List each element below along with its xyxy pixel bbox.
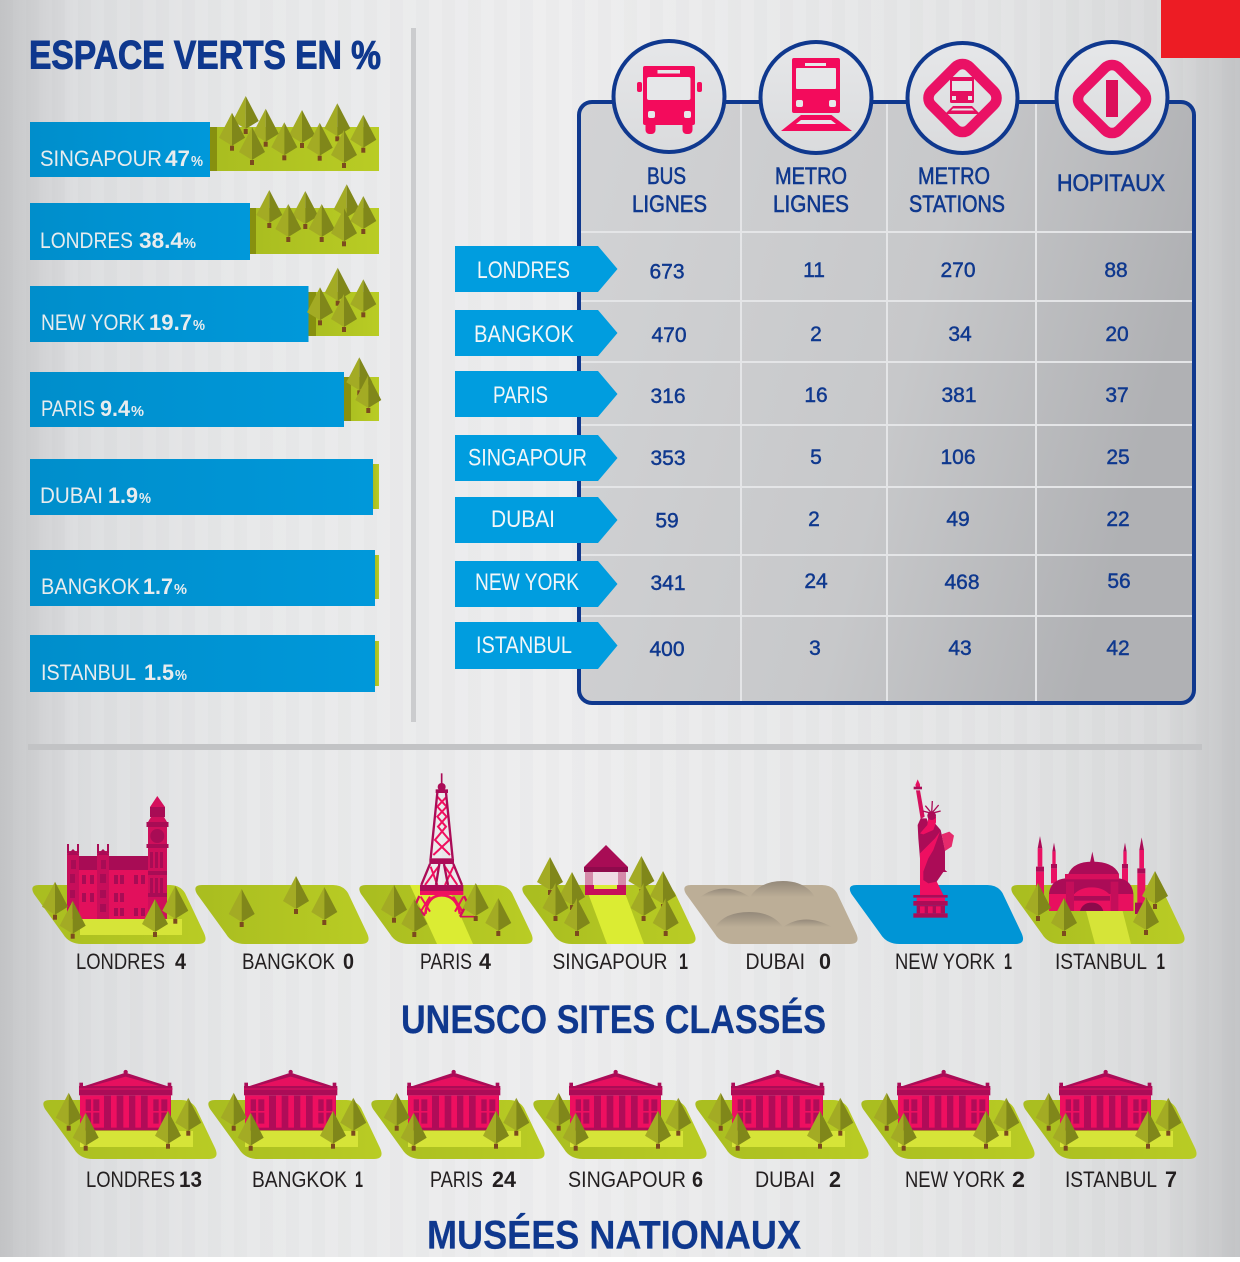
- row: Bangkok: 2: [810, 323, 822, 346]
- panel: UNESCO sites: [32, 773, 1185, 1042]
- row: Paris: [455, 371, 1129, 417]
- bar: Bangkok: %: [174, 581, 187, 598]
- bar: Paris: PARIS: [41, 396, 95, 421]
- site: New York, statue of liberty: NEW YORK: [895, 949, 995, 974]
- row: New York: 468: [944, 571, 980, 594]
- row: Bangkok: 34: [948, 323, 972, 346]
- row: Londres: [455, 246, 1128, 292]
- title: espace verts: ESPACE VERTS EN %: [29, 34, 381, 78]
- museum: Singapour: 6: [692, 1167, 703, 1192]
- museum: Londres: [43, 1070, 217, 1192]
- bar: New York: [30, 268, 379, 342]
- site: Londres: LONDRES: [76, 949, 165, 974]
- site: Paris, Eiffel tower: PARIS: [420, 949, 472, 974]
- row: Singapour: 25: [1106, 446, 1130, 469]
- site: Istanbul, mosque: ISTANBUL: [1055, 949, 1147, 974]
- row: Londres: 270: [940, 259, 976, 282]
- bar: Londres: LONDRES: [40, 228, 133, 253]
- row: Dubai: 49: [946, 508, 970, 531]
- row: Paris: 381: [941, 384, 977, 407]
- site: Dubai, dunes: 0: [819, 949, 831, 974]
- icon: bus: [614, 41, 724, 152]
- museum: Londres: 13: [179, 1167, 202, 1192]
- site: Londres: [32, 796, 206, 974]
- row: Bangkok: [455, 310, 1129, 356]
- museum: Singapour: SINGAPOUR: [568, 1167, 686, 1192]
- column headings: BUS: [647, 163, 686, 190]
- row: Istanbul: 43: [948, 637, 972, 660]
- bar: Dubai: %: [139, 490, 151, 507]
- row: Singapour: 353: [650, 447, 686, 470]
- row: New York: 341: [650, 572, 686, 595]
- bar: New York: %: [193, 317, 205, 334]
- row: Istanbul: [455, 622, 1130, 669]
- bar: Paris: [30, 357, 381, 427]
- site: Istanbul, mosque: 1: [1156, 949, 1165, 974]
- row: New York: 24: [804, 570, 828, 593]
- museum: New York: 2: [1012, 1167, 1025, 1192]
- row: Bangkok: 470: [651, 324, 687, 347]
- column headings: HOPITAUX: [1057, 170, 1165, 197]
- panel: transport table: [455, 41, 1194, 703]
- site: Singapour, gazebo: SINGAPOUR: [552, 949, 668, 974]
- row: New York: NEW YORK: [475, 569, 579, 596]
- site: Bangkok: 0: [343, 949, 354, 974]
- museum: Istanbul: ISTANBUL: [1065, 1167, 1157, 1192]
- column headings: [632, 163, 1165, 218]
- row: Singapour: 106: [940, 446, 976, 469]
- row: Istanbul: 42: [1106, 637, 1130, 660]
- row: Paris: 37: [1105, 384, 1129, 407]
- icon: metro line: [760, 42, 872, 153]
- bar: Istanbul: [30, 635, 379, 692]
- row: Singapour: SINGAPOUR: [468, 444, 587, 472]
- row: Dubai: 22: [1106, 508, 1130, 531]
- bar: Dubai: [30, 459, 379, 515]
- museum: New York: NEW YORK: [905, 1167, 1005, 1192]
- row: Dubai: 2: [808, 508, 820, 531]
- museum: Istanbul: [1023, 1070, 1197, 1192]
- column headings: LIGNES: [773, 191, 849, 218]
- row: Paris: 16: [804, 384, 828, 407]
- row: Bangkok: 20: [1105, 323, 1129, 346]
- row: Londres: 673: [649, 260, 685, 284]
- icon: hospital: [1056, 42, 1168, 153]
- row: Singapour: 5: [810, 446, 822, 469]
- column headings: METRO: [775, 163, 847, 190]
- bar: New York: NEW YORK: [41, 310, 145, 335]
- site: Dubai, dunes: DUBAI: [746, 949, 805, 974]
- museum: Bangkok: 1: [355, 1167, 363, 1192]
- museum: Paris: PARIS: [430, 1167, 483, 1192]
- bar: Istanbul: 1.5: [144, 660, 174, 685]
- panel: national museums: [43, 1070, 1197, 1258]
- column headings: LIGNES: [632, 191, 707, 218]
- museum: New York: [861, 1070, 1035, 1192]
- site: Londres: 4: [175, 949, 187, 974]
- bar: Londres: 38.4: [139, 228, 184, 253]
- row: Paris: 316: [650, 385, 686, 408]
- heading: UNESCO: UNESCO SITES CLASSÉS: [401, 997, 826, 1042]
- row: Bangkok: BANGKOK: [474, 321, 574, 348]
- red corner square: [1161, 0, 1240, 58]
- row: Londres: 88: [1104, 259, 1128, 282]
- museum: Bangkok: [208, 1070, 382, 1192]
- bar: Istanbul: ISTANBUL: [41, 660, 136, 685]
- museum: Londres: LONDRES: [86, 1167, 175, 1192]
- bar chart: green space: [30, 96, 381, 692]
- site: New York, statue of liberty: [850, 779, 1023, 974]
- museum: Bangkok: BANGKOK: [252, 1167, 347, 1192]
- bar: Londres: %: [183, 235, 196, 252]
- column headings: METRO: [918, 163, 990, 190]
- bar: Singapour: 47: [165, 146, 190, 171]
- row: Istanbul: 400: [649, 638, 685, 661]
- row: Dubai: 59: [655, 510, 679, 532]
- column headings: STATIONS: [909, 191, 1005, 218]
- site: Bangkok: [195, 876, 369, 974]
- icon: metro station: [908, 43, 1018, 153]
- museum: Paris: [371, 1070, 545, 1192]
- museum: Dubai: 2: [829, 1167, 841, 1192]
- bar: Londres: [30, 184, 379, 260]
- heading: musées: MUSÉES NATIONAUX: [427, 1212, 801, 1258]
- museum: Paris: 24: [492, 1167, 517, 1192]
- bar: New York: 19.7: [149, 310, 192, 335]
- bar: Dubai: 1.9: [108, 483, 138, 508]
- site: Paris, Eiffel tower: [359, 773, 533, 974]
- site: Paris, Eiffel tower: 4: [479, 949, 492, 974]
- site: Singapour, gazebo: [522, 845, 696, 974]
- site: Singapour, gazebo: 1: [679, 949, 688, 974]
- row: Istanbul: ISTANBUL: [476, 632, 572, 659]
- bar: Paris: %: [131, 403, 144, 420]
- bar: Paris: 9.4: [100, 396, 131, 421]
- site: New York, statue of liberty: 1: [1004, 949, 1012, 974]
- row: Paris: PARIS: [493, 382, 548, 409]
- site: Dubai, dunes: [684, 881, 858, 974]
- bar: Bangkok: BANGKOK: [41, 574, 140, 599]
- row: Singapour: [455, 435, 1130, 481]
- bar: Singapour: [30, 96, 379, 177]
- site: Istanbul, mosque: [1011, 836, 1185, 974]
- museum: Dubai: [695, 1070, 869, 1192]
- row: New York: 56: [1107, 570, 1131, 593]
- bar: Bangkok: [30, 550, 379, 606]
- museum: Dubai: DUBAI: [755, 1167, 815, 1192]
- site: Bangkok: BANGKOK: [242, 949, 335, 974]
- row: Londres: 11: [803, 259, 825, 282]
- row: Istanbul: 3: [809, 637, 821, 660]
- bar: Singapour: SINGAPOUR: [40, 146, 162, 171]
- bar: Istanbul: %: [175, 667, 187, 684]
- row: Dubai: DUBAI: [491, 506, 555, 533]
- row: Dubai: [455, 497, 1130, 543]
- row: Londres: LONDRES: [477, 257, 570, 284]
- bar: Bangkok: 1.7: [143, 574, 173, 599]
- bar: Singapour: %: [191, 153, 203, 170]
- row: New York: [455, 561, 1131, 607]
- museum: Istanbul: 7: [1165, 1167, 1177, 1192]
- bar: Dubai: DUBAI: [40, 483, 103, 508]
- museum: Singapour: [533, 1070, 707, 1192]
